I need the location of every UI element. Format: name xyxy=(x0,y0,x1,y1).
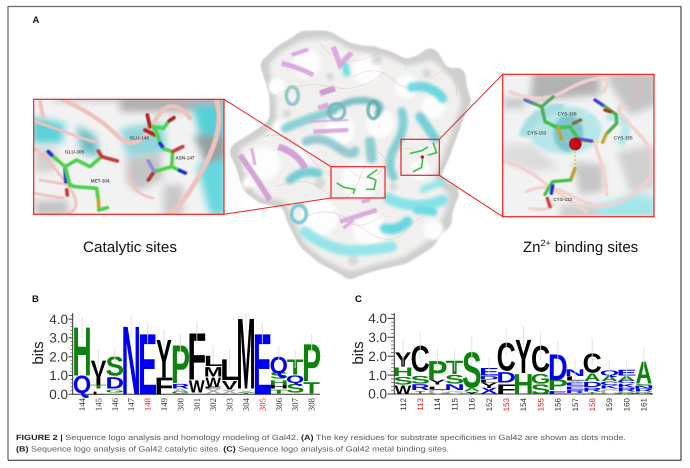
logo B letters: V xyxy=(222,379,238,392)
logo C letters: L xyxy=(427,386,447,390)
logo C letters: C xyxy=(531,338,550,379)
logo C letters: A xyxy=(584,371,601,384)
logo C letters: A xyxy=(463,388,480,392)
logo C letters: C xyxy=(600,388,619,396)
logo C position labels: 158 xyxy=(588,397,597,411)
logo C letters: C xyxy=(617,380,636,384)
logo B axis: 0.0 xyxy=(49,387,68,402)
logo C position labels: 152 xyxy=(485,397,494,411)
logo C letters: E xyxy=(565,382,585,386)
logo B letters: Q xyxy=(73,370,91,398)
logo C letters: Y xyxy=(481,381,497,390)
heading: zinc binding sites: Zn xyxy=(523,239,541,256)
beta sheets xyxy=(240,47,377,228)
right residue labels: CYS-155 xyxy=(614,135,633,140)
logo C letters: T xyxy=(415,390,425,395)
logo C letters: G xyxy=(617,391,636,395)
logo C letters: C xyxy=(583,348,602,378)
logo B letters: M xyxy=(237,298,255,411)
alpha helices xyxy=(285,65,443,250)
right zoom inset: zinc binding sites xyxy=(503,72,657,218)
logo C error bars xyxy=(403,326,644,379)
logo C letters: D xyxy=(496,369,516,386)
left residue labels: GLU-305 xyxy=(65,149,84,155)
panel label B: B xyxy=(32,294,39,305)
logo B letters: L xyxy=(204,353,223,369)
logo C position labels: 113 xyxy=(416,397,425,411)
logo C position labels: 156 xyxy=(554,397,563,411)
logo C letters: C xyxy=(497,334,516,379)
right residue labels xyxy=(527,111,633,202)
logo B letters: I xyxy=(95,375,102,387)
logo B axis: 1.0 xyxy=(49,368,68,383)
logo B position labels: 145 xyxy=(93,397,103,411)
logo B letters: H xyxy=(269,379,288,386)
logo B letters: T xyxy=(238,392,254,395)
right residue sticks xyxy=(525,97,617,207)
logo B letters: L xyxy=(92,391,105,395)
logo C letters: W xyxy=(395,383,411,397)
logo B letters: V xyxy=(91,355,106,383)
logo B position labels: 307 xyxy=(290,397,300,411)
logo C letters: H xyxy=(393,365,413,379)
left residue labels xyxy=(65,135,195,184)
logo C letters: R xyxy=(617,387,636,393)
figure caption: (B) Sequence logo analysis of Gal42 catalytic sites. (C) Sequence logo analysis of Gal42 metal binding sites. xyxy=(16,444,449,454)
logo B position labels: 148 xyxy=(143,397,153,411)
logo B letters: H xyxy=(72,313,92,391)
logo C letters: Y xyxy=(429,378,446,386)
logo B letters: P xyxy=(302,333,321,393)
logo B letters: X xyxy=(205,387,221,395)
logo C position labels: 159 xyxy=(605,397,614,411)
heading: catalytic sites: Catalytic sites xyxy=(83,239,177,256)
left zoom inset: catalytic sites xyxy=(32,95,227,217)
right residue labels: CYS-158 xyxy=(558,111,577,117)
logo B letters: T xyxy=(303,379,320,397)
logo C letters: Y xyxy=(395,348,411,371)
logo C letters: K xyxy=(600,384,619,390)
logo B letters: S xyxy=(270,370,288,380)
logo B letters: W xyxy=(205,374,221,390)
logo C letters xyxy=(393,330,654,400)
logo C letters: P xyxy=(548,377,568,394)
logo B position labels: 149 xyxy=(159,397,169,411)
logo C letters: X xyxy=(481,386,497,395)
logo C letters: N xyxy=(444,383,465,392)
logo C letters: X xyxy=(567,380,583,383)
logo B letters: X xyxy=(238,390,254,393)
logo C letters: S xyxy=(462,342,482,399)
logo C letters: G xyxy=(531,371,550,387)
logo C axis: bits xyxy=(350,341,367,365)
logo C letters: N xyxy=(565,367,585,378)
left residue labels: MET-304 xyxy=(91,178,110,184)
logo C position labels: 160 xyxy=(622,397,631,411)
left residue labels: ASN-147 xyxy=(175,155,195,161)
sequence logo B xyxy=(30,298,321,416)
logo C axis: 0.0 xyxy=(368,387,387,402)
logo B letters: E xyxy=(204,386,223,389)
figure caption xyxy=(16,433,626,454)
loops xyxy=(263,43,457,239)
logo C position labels: 153 xyxy=(502,397,511,411)
logo C position labels: 115 xyxy=(450,397,459,411)
logo B letters: M xyxy=(204,364,223,379)
logo B letters xyxy=(72,298,321,416)
logo B letters: T xyxy=(270,388,287,395)
logo B letters: R xyxy=(171,383,189,390)
logo C letters: E xyxy=(548,390,568,395)
logo C letters: L xyxy=(479,379,499,383)
right residue labels: CYS-153 xyxy=(527,130,546,136)
logo B position labels: 147 xyxy=(126,397,136,411)
right residue labels: CYS-113 xyxy=(553,197,572,202)
logo B error bars xyxy=(82,314,312,370)
logo B letters: W xyxy=(189,376,205,396)
logo B letters: Y xyxy=(156,328,172,389)
logo C axis: 3.0 xyxy=(368,330,387,345)
logo C position labels: 114 xyxy=(433,397,442,411)
logo B letters: T xyxy=(287,355,304,379)
logo B position labels: 308 xyxy=(307,397,317,411)
logo C letters: R xyxy=(565,389,585,394)
protein surface xyxy=(230,30,471,280)
logo C axis: 2.0 xyxy=(368,349,387,364)
logo C position labels: 161 xyxy=(640,397,649,411)
logo C letters: R xyxy=(583,387,602,393)
logo B axis: bits xyxy=(30,341,47,365)
logo B position labels: 300 xyxy=(175,397,185,411)
left residue sticks xyxy=(48,115,185,210)
logo C letters: G xyxy=(634,391,654,395)
logo C axis: 1.0 xyxy=(368,368,387,383)
logo B position labels: 303 xyxy=(225,397,235,411)
logo C letters: T xyxy=(446,357,463,378)
logo B letters: S xyxy=(106,351,124,382)
heading: zinc binding sites: 2+ xyxy=(541,238,551,248)
logo C letters: C xyxy=(600,381,619,386)
panel label C: C xyxy=(355,294,362,305)
logo C letters: G xyxy=(445,390,464,395)
logo C letters: D xyxy=(479,375,499,380)
logo B letters: A xyxy=(173,388,188,392)
logo B letters: P xyxy=(171,334,190,395)
logo C letters: H xyxy=(513,368,534,400)
logo B position labels: 144 xyxy=(77,397,87,411)
zinc coordination bonds xyxy=(563,139,603,166)
logo C letters: C xyxy=(428,388,447,396)
logo B letters: E xyxy=(253,316,272,414)
logo C letters: E xyxy=(616,368,637,378)
logo C letters: A xyxy=(601,374,618,383)
figure caption: FIGURE 2 | Sequence logo analysis and homology modeling of Gal42. (A) The key residues for substrate specificities in Gal42 are shown as dots mode. xyxy=(16,433,626,442)
logo C letters: Y xyxy=(463,391,480,395)
logo B letters: S xyxy=(286,381,304,395)
logo C position labels: 112 xyxy=(399,397,408,411)
logo C letters: C xyxy=(411,338,430,379)
zoom boxes and connectors xyxy=(34,74,654,217)
logo B position labels: 304 xyxy=(241,397,251,411)
logo B letters: N xyxy=(122,306,141,416)
logo C letters: R xyxy=(634,388,653,393)
logo B letters: Q xyxy=(270,352,288,379)
logo B letters: X xyxy=(222,388,238,395)
logo C letters: Q xyxy=(600,369,619,377)
logo C letters: E xyxy=(565,386,585,390)
logo B position labels: 302 xyxy=(208,398,218,411)
sequence logo C xyxy=(350,311,654,411)
logo B letters: D xyxy=(105,374,124,392)
logo C letters: L xyxy=(565,375,585,382)
logo C letters: T xyxy=(587,391,597,395)
logo B letters: F xyxy=(155,372,173,400)
logo C axis: 4.0 xyxy=(368,311,387,326)
logo C letters: A xyxy=(635,355,652,391)
logo C letters: D xyxy=(582,380,602,388)
residues in boxes xyxy=(337,143,437,193)
logo C position labels: 116 xyxy=(468,397,477,411)
logo C axis xyxy=(350,311,653,402)
logo C letters: P xyxy=(427,355,448,386)
logo C letters: F xyxy=(496,382,516,397)
logo C letters: K xyxy=(617,382,636,389)
logo B axis: 4.0 xyxy=(49,312,68,327)
logo B position labels: 305 xyxy=(257,397,267,411)
logo C letters: Y xyxy=(515,330,532,384)
logo B position labels xyxy=(77,397,317,411)
logo B position labels: 146 xyxy=(110,397,120,411)
logo C letters: N xyxy=(634,385,654,390)
logo B letters: F xyxy=(187,319,206,394)
logo B axis xyxy=(30,312,320,402)
logo C letters: A xyxy=(618,375,635,382)
logo C letters: S xyxy=(531,382,550,397)
logo C letters: S xyxy=(410,374,430,386)
logo C letters: S xyxy=(445,372,464,386)
protein structure xyxy=(230,30,471,280)
heading: zinc binding sites: binding sites xyxy=(555,239,638,256)
logo B letters: G xyxy=(171,391,190,394)
logo B position labels: 301 xyxy=(192,398,202,411)
logo C letters: R xyxy=(411,383,430,392)
logo B letters: T xyxy=(90,384,107,390)
left residue labels: GLU-148 xyxy=(130,135,149,140)
panel label A: A xyxy=(32,15,40,26)
logo B axis: 2.0 xyxy=(49,349,68,364)
logo B position labels: 306 xyxy=(274,397,284,411)
logo B letters: G xyxy=(106,389,124,393)
logo C letters: S xyxy=(634,383,654,387)
logo B axis: 3.0 xyxy=(49,331,68,346)
logo B letters: Q xyxy=(286,373,304,385)
logo B letters: H xyxy=(269,384,288,390)
logo C letters: S xyxy=(393,375,413,387)
helix rings xyxy=(286,87,379,223)
logo C position labels: 155 xyxy=(536,397,545,411)
logo C position labels: 154 xyxy=(519,397,528,411)
logo B letters: L xyxy=(220,353,239,387)
logo C position labels xyxy=(399,397,649,411)
zinc ion xyxy=(569,138,582,150)
logo B letters: E xyxy=(138,316,157,414)
logo C letters: E xyxy=(479,366,499,378)
logo C position labels: 157 xyxy=(571,397,580,411)
logo C letters: D xyxy=(548,346,568,388)
